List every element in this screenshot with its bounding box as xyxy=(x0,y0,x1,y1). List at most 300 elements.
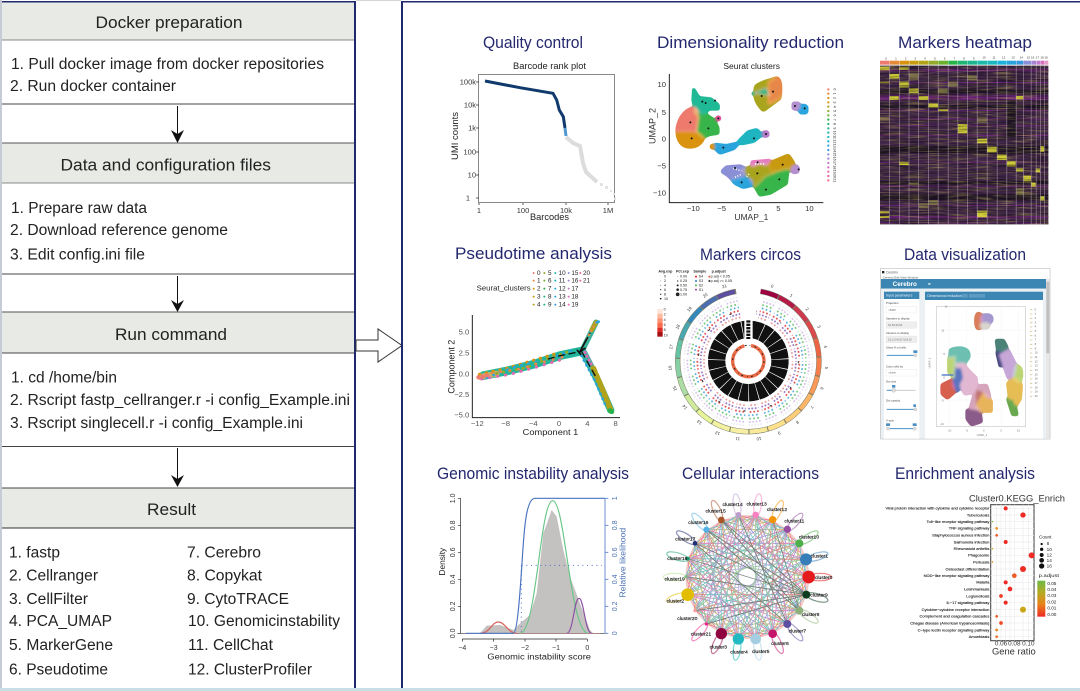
panel: input parameters: cluster xyxy=(889,372,896,375)
panel: input parameters: Dot opacity xyxy=(886,399,901,403)
step: Result: 3. CellFilter xyxy=(9,591,88,608)
chart: genomic instability density: −4 xyxy=(458,645,466,652)
step: Result: 12. ClusterProfiler xyxy=(188,662,312,678)
top island xyxy=(752,78,781,111)
legend: seurat clusters: 20 xyxy=(583,270,591,277)
node labels xyxy=(665,502,833,656)
chart: UMAP clusters: UMAP_1 xyxy=(734,212,769,222)
sector labels: 1 xyxy=(789,293,794,298)
chart: markers heatmap: 2 xyxy=(905,56,907,60)
legend: cerebro clusters: 2 xyxy=(1035,316,1037,320)
legends: 1.00 xyxy=(680,293,687,297)
legend: seurat clusters: 6 xyxy=(548,278,552,285)
sector labels: 0 xyxy=(770,283,775,289)
pathway labels: Cytokine−cytokine receptor interaction xyxy=(922,607,989,612)
legends xyxy=(658,270,732,301)
step: Data and configuration files: 3. Edit config.ini file xyxy=(10,246,145,264)
legends: S1 xyxy=(699,288,703,292)
chart: KEGG enrichment dot plot: Cluster0.KEGG_Enrich xyxy=(969,494,1065,504)
black bar track xyxy=(712,324,785,398)
chart: pseudotime trajectory: −12 xyxy=(471,419,484,428)
chart: markers heatmap: 13 xyxy=(1011,55,1015,59)
cluster centre markers xyxy=(689,91,806,191)
chart: genomic instability density: −2 xyxy=(521,645,529,652)
legend: seurat clusters: 13 xyxy=(559,294,566,301)
chart: barcode rank plot: 100k xyxy=(460,78,476,86)
pathway labels: Phagosome xyxy=(968,553,990,558)
legend: clusters: 5 xyxy=(832,110,836,112)
chart: barcode rank plot: 1 xyxy=(477,206,481,215)
chart: pseudotime trajectory: Component 1 xyxy=(523,427,579,437)
chart: KEGG enrichment dot plot: 0.06 xyxy=(995,641,1008,648)
node labels: cluster2 xyxy=(667,599,684,605)
step: Result: 4. PCA_UMAP xyxy=(9,613,112,630)
panel: dimensional reduction: 5 xyxy=(1000,429,1002,433)
sector labels: 21 xyxy=(721,283,728,289)
heading: Pseudotime analysis: Pseudotime analysis xyxy=(455,244,612,263)
panel: workflow steps xyxy=(0,0,356,688)
screenshot: Cerebro app xyxy=(881,268,1050,439)
legend: seurat clusters: 5 xyxy=(548,270,552,277)
colour bar: 2 xyxy=(664,313,666,317)
legend: seurat clusters: 12 xyxy=(559,286,566,293)
legend: cerebro clusters: 9 xyxy=(1035,346,1037,350)
arrow: data to run xyxy=(171,276,184,312)
chart: pseudotime trajectory: Component 2 xyxy=(447,340,457,394)
step: Result: 7. Cerebro xyxy=(187,544,261,562)
chart: KEGG enrichment dot plot: 0.08 xyxy=(1008,641,1021,648)
panel: dimensional reduction: -5 xyxy=(941,399,944,403)
panel: input parameters: Input parameters xyxy=(886,294,913,298)
chart: KEGG enrichment dot plot: Gene ratio xyxy=(992,646,1036,656)
chart: UMAP clusters: UMAP_2 xyxy=(648,108,658,144)
pathway labels: IL−17 signaling pathway xyxy=(946,600,989,605)
legend: count xyxy=(1039,535,1052,569)
panel: dimensional reduction: UMAP_2 xyxy=(928,357,932,368)
node labels: cluster15 xyxy=(706,509,726,515)
step: Result: 6. Pseudotime xyxy=(9,662,108,678)
node labels: cluster1 xyxy=(811,554,828,560)
step: Data and configuration files: 1. Prepare raw data xyxy=(11,200,147,217)
legend: clusters: 9 xyxy=(832,127,836,129)
colour bar: 8 xyxy=(664,328,666,332)
legend: cerebro clusters: 11 xyxy=(1035,355,1038,359)
chart: barcode rank plot: 1 xyxy=(466,194,470,202)
pathway labels: Amoebiasis xyxy=(969,634,989,639)
panel: dimensional reduction: 0 xyxy=(943,375,945,379)
chart: UMAP clusters: 5 xyxy=(776,204,780,213)
panel: outputs frame xyxy=(356,0,1080,688)
legends: 10 xyxy=(664,297,668,301)
step: Result: 1. fastp xyxy=(9,544,60,562)
chart: markers heatmap: 17 xyxy=(1036,55,1039,59)
legends: p.adjust xyxy=(712,270,726,274)
sector labels: 9 xyxy=(777,430,781,436)
chart: pseudotime trajectory: 2.5 xyxy=(459,348,469,357)
UMAP blobs xyxy=(942,313,1022,425)
chart: genomic instability density: −1 xyxy=(552,645,560,652)
chart: genomic instability density: 0 xyxy=(585,645,589,652)
legend: clusters: 16 xyxy=(832,157,836,161)
panel: input parameters: Projection xyxy=(886,301,899,305)
legend: cerebro clusters: 13 xyxy=(1035,364,1038,368)
legend: clusters: 15 xyxy=(832,152,836,156)
panel: input parameters: Clusters to display xyxy=(886,331,910,335)
chart: genomic instability density: 0.0 xyxy=(450,628,457,638)
pathway labels: Salmonella infection xyxy=(954,539,989,544)
panel: input parameters: Show % of cells xyxy=(886,345,907,349)
step: Run command: 1. cd /home/bin xyxy=(11,370,117,386)
legend: clusters: 2 xyxy=(832,97,836,99)
legend: seurat clusters: 14 xyxy=(559,302,566,309)
step: Data and configuration files xyxy=(2,143,354,274)
sector labels: 17 xyxy=(668,343,674,350)
legends: S3 xyxy=(699,279,703,283)
step: Docker preparation: 1. Pull docker image from docker repositories xyxy=(11,56,324,73)
sector labels: 12 xyxy=(714,430,721,436)
panel: input parameters: S1,S2,S3,S4 xyxy=(888,324,903,327)
chart: genomic instability density: Genomic instability score xyxy=(487,651,591,661)
legend: clusters xyxy=(827,88,836,182)
right island xyxy=(792,102,808,114)
panel: input parameters xyxy=(884,292,919,439)
chart: barcode rank plot: 1k xyxy=(468,124,476,132)
colour bar: 0 xyxy=(664,307,666,311)
screenshot: Cerebro app: Cerebro xyxy=(893,281,917,288)
sector labels: 14 xyxy=(681,403,688,411)
chart: markers heatmap: 14 xyxy=(1020,55,1023,59)
node labels: cluster8 xyxy=(802,612,820,618)
chart: markers heatmap: 1 xyxy=(895,56,897,60)
sector labels: 5 xyxy=(824,366,829,370)
step: Run command: 2. Rscript fastp_cellranger.r -i config_Example.ini xyxy=(10,392,350,409)
legends: 8 xyxy=(664,293,666,297)
step: Result: 11. CellChat xyxy=(188,637,274,654)
chart: pseudotime trajectory: −4 xyxy=(529,419,538,428)
node labels: cluster5 xyxy=(752,649,770,655)
legend: seurat clusters: 16 xyxy=(571,278,579,285)
chart: markers heatmap: 15 xyxy=(1027,55,1030,59)
legend: count: 10 xyxy=(1047,547,1052,552)
legend: clusters: 13 xyxy=(832,144,836,148)
pathway labels xyxy=(886,506,990,639)
legend: clusters: 11 xyxy=(832,135,836,139)
legend: seurat clusters: 10 xyxy=(559,270,566,277)
legends: p.adj < 0.05 xyxy=(711,275,730,279)
chart: markers heatmap: 0 xyxy=(885,56,887,60)
pathway labels: Viral protein interaction with cytokine and cytokine receptor xyxy=(886,506,990,511)
dots xyxy=(991,506,1035,638)
sector labels xyxy=(667,283,829,442)
pathway labels: NOD−like receptor signaling pathway xyxy=(924,573,989,578)
pathway labels: Osteoclast differentiation xyxy=(946,566,989,571)
chart: pseudotime trajectory: 4 xyxy=(585,419,590,428)
sector labels: 19 xyxy=(686,305,693,313)
chart: markers heatmap: 6 xyxy=(944,56,946,60)
step: Result: 2. Cellranger xyxy=(9,568,98,584)
left island xyxy=(677,88,720,147)
step: Result xyxy=(2,488,354,678)
pathway labels: Leishmaniasis xyxy=(964,586,989,591)
panel: input parameters: Dot size xyxy=(886,380,897,384)
heat matrix xyxy=(880,66,1048,224)
chart: genomic instability density xyxy=(437,493,627,661)
legends: Avg.exp xyxy=(658,270,673,274)
chart: barcode rank plot xyxy=(450,61,616,223)
step: Run command: 3. Rscript singlecell.r -i config_Example.ini xyxy=(10,415,303,432)
legend: cerebro clusters: 12 xyxy=(1035,359,1038,363)
legend: seurat clusters: 15 xyxy=(571,270,579,277)
colour strip xyxy=(880,61,1048,65)
step: Docker preparation: 2. Run docker container xyxy=(10,78,176,95)
legend: seurat clusters xyxy=(477,270,591,309)
right axis: 0.6 xyxy=(612,547,619,557)
outer sector ring xyxy=(648,261,848,461)
chart: UMAP clusters: −5 xyxy=(657,162,666,171)
step: Docker preparation: Docker preparation xyxy=(96,13,242,32)
panel: dimensional reduction xyxy=(925,292,1043,439)
legends: 4 xyxy=(664,284,666,288)
chart: UMAP clusters: −10 xyxy=(653,189,666,198)
chart: UMAP clusters: −5 xyxy=(717,204,726,213)
heading: Data visualization: Data visualization xyxy=(904,245,1026,264)
density area xyxy=(480,510,593,633)
legend: seurat clusters: Seurat_clusters xyxy=(477,286,531,293)
chart: UMAP clusters: −10 xyxy=(687,204,700,213)
chart: UMAP clusters: 0 xyxy=(662,135,666,144)
right axis: Relative likelihood xyxy=(617,528,627,598)
legend: cerebro clusters: 20 xyxy=(1035,394,1038,398)
screenshot: Cerebro app: Cerebro xyxy=(886,270,898,274)
chart: genomic instability density: 0.6 xyxy=(450,547,457,557)
legend: p.adjust: 0.02 xyxy=(1047,599,1057,604)
legend: cerebro clusters: 19 xyxy=(1035,390,1038,394)
legends: S2 xyxy=(699,284,703,288)
legend: p.adjust: 0.04 xyxy=(1047,587,1057,592)
pathway labels: Toll−like receptor signaling pathway xyxy=(927,519,989,524)
sector labels: 10 xyxy=(756,436,762,442)
mixture curves xyxy=(466,498,605,633)
legends: p.adj >= 0.05 xyxy=(711,279,732,283)
chart: genomic instability density: −3 xyxy=(490,645,498,652)
chart: barcode rank plot: 1M xyxy=(603,206,613,215)
legends: 0.00 xyxy=(680,275,687,279)
sector labels: 20 xyxy=(702,292,709,299)
sector labels: 2 xyxy=(805,307,810,312)
sector labels: 8 xyxy=(794,420,800,425)
colour bar: 10 xyxy=(664,333,668,337)
pathway labels: Staphylococcus aureus infection xyxy=(932,533,989,538)
legend: p.adjust xyxy=(1037,573,1060,617)
panel: dimensional reduction: UMAP_1 xyxy=(977,433,988,437)
panel: input parameters: 0,1,2,3,4,5,6,7,8,9,10 xyxy=(888,338,912,341)
right axis xyxy=(605,496,627,635)
legend: cerebro clusters: 6 xyxy=(1035,333,1037,337)
node labels: cluster21 xyxy=(691,631,711,637)
chart: UMAP clusters: 10 xyxy=(657,80,666,89)
legend: cerebro clusters: 16 xyxy=(1035,377,1038,381)
legend: clusters: 4 xyxy=(832,106,836,108)
legend: p.adjust: p.adjust xyxy=(1039,573,1060,578)
chart: pseudotime trajectory: 0.0 xyxy=(459,369,469,378)
node labels: cluster19 xyxy=(665,576,685,582)
step: Result: Result xyxy=(147,500,196,519)
legend: cerebro clusters xyxy=(1030,307,1038,398)
chart: barcode rank plot: 10 xyxy=(468,170,476,180)
node labels: cluster10 xyxy=(799,535,819,541)
right axis: 0 xyxy=(612,631,619,635)
bottom island xyxy=(722,155,799,195)
legend: clusters: 10 xyxy=(832,131,836,135)
node labels: cluster13 xyxy=(747,502,767,508)
legend: clusters: 12 xyxy=(832,139,836,143)
node labels: cluster6 xyxy=(771,641,789,647)
dotted marker tracks xyxy=(684,297,813,425)
legend: seurat clusters: 2 xyxy=(537,286,541,293)
chart: barcode rank plot: 10k xyxy=(464,100,476,110)
legends: Pct.exp xyxy=(676,270,690,274)
chart: UMAP clusters: 5 xyxy=(662,108,666,117)
sector labels: 13 xyxy=(695,419,703,426)
pathway labels: Legionellosis xyxy=(966,593,989,598)
legend: seurat clusters: 19 xyxy=(571,302,579,309)
chart: markers heatmap: 5 xyxy=(934,56,936,60)
legend: clusters: 14 xyxy=(832,148,836,152)
node labels: cluster16 xyxy=(688,520,709,526)
legend: p.adjust: 0.00 xyxy=(1047,612,1057,617)
step: Result: 10. Genomicinstability xyxy=(188,613,340,630)
legend: clusters: 18 xyxy=(832,165,836,169)
legend: seurat clusters: 18 xyxy=(571,294,579,301)
legend: cerebro clusters: 3 xyxy=(1035,320,1037,324)
chart: genomic instability density: Density xyxy=(437,547,447,576)
legend: p.adjust: 0.01 xyxy=(1047,606,1057,611)
legend: cerebro clusters: 17 xyxy=(1035,381,1038,385)
sector labels: 4 xyxy=(823,345,828,349)
chart: pseudotime trajectory: 5.0 xyxy=(459,327,469,336)
legends: 2 xyxy=(664,279,666,283)
chart: barcode rank plot: 10k xyxy=(560,206,572,215)
right axis: 0.8 xyxy=(612,520,619,530)
heading: Markers heatmap: Markers heatmap xyxy=(898,33,1032,52)
panel: dimensional reduction: -5 xyxy=(966,429,969,433)
heading: Enrichment analysis: Enrichment analysis xyxy=(895,464,1035,483)
panel: input parameters: UMAP xyxy=(889,309,896,312)
chart: genomic instability density: 0.4 xyxy=(450,574,457,584)
chart: markers heatmap: 16 xyxy=(1031,55,1035,59)
sector labels: 11 xyxy=(735,436,740,442)
panel: dimensional reduction: -10 xyxy=(940,422,944,426)
legend: seurat clusters: 8 xyxy=(548,294,552,301)
legend: seurat clusters: 7 xyxy=(548,286,552,293)
legends: Sample xyxy=(693,270,706,274)
legend: seurat clusters: 3 xyxy=(537,294,541,301)
step: Run command xyxy=(2,312,354,446)
arrow: workflow to outputs xyxy=(356,329,402,362)
chart: pseudotime trajectory: −8 xyxy=(501,419,510,428)
legend: cerebro clusters: 7 xyxy=(1035,338,1037,342)
legend: cerebro clusters: 1 xyxy=(1035,312,1037,316)
pathway labels: Pertussis xyxy=(973,559,989,564)
legend: clusters: 6 xyxy=(832,114,836,116)
colour bar xyxy=(657,307,668,337)
colour bar: 4 xyxy=(664,318,666,322)
legend: clusters: 17 xyxy=(832,161,836,165)
chart: markers heatmap: 12 xyxy=(1002,55,1006,59)
step: Run command: Run command xyxy=(115,325,227,344)
panel: input parameters: Color cells by xyxy=(886,364,904,368)
chart: markers heatmap: 4 xyxy=(924,56,926,60)
legend: clusters: 21 xyxy=(832,178,836,182)
panel: dimensional reduction: -10 xyxy=(947,429,952,433)
legend: cerebro clusters: 18 xyxy=(1035,385,1038,389)
node labels: cluster7 xyxy=(789,629,806,635)
chart: markers circos xyxy=(648,261,848,461)
chart: markers heatmap: 10 xyxy=(982,55,986,59)
chart: UMAP clusters: 0 xyxy=(748,204,752,213)
panel: dimensional reduction: 10 xyxy=(941,329,945,333)
legend: p.adjust: 0.03 xyxy=(1047,593,1057,598)
legend: cerebro clusters: 5 xyxy=(1035,329,1037,333)
chart: markers heatmap: 3 xyxy=(914,56,916,60)
screenshot: Cerebro app: ≡ xyxy=(928,282,931,287)
page frame: bottom strip xyxy=(0,688,1080,691)
legend: clusters: 20 xyxy=(832,174,836,178)
legends: 0.75 xyxy=(680,288,687,292)
middle islands xyxy=(711,129,768,153)
chart: UMAP clusters xyxy=(648,62,836,222)
pathway labels: TNF signaling pathway xyxy=(949,526,989,531)
pathway labels: Chagas disease (American trypanosomiasis) xyxy=(910,620,990,625)
legend: seurat clusters: 9 xyxy=(548,302,552,309)
right axis: 0.2 xyxy=(612,601,619,611)
legend: seurat clusters: 4 xyxy=(537,302,541,309)
legend: seurat clusters: 17 xyxy=(571,286,579,293)
sector labels: 15 xyxy=(671,385,678,392)
arrow: docker to data xyxy=(171,106,184,143)
chart: pseudotime trajectory: −2.5 xyxy=(454,390,469,399)
panel: dimensional reduction: 10 xyxy=(1017,429,1020,433)
legend: clusters: 19 xyxy=(832,170,836,174)
chart: markers heatmap: 11 xyxy=(992,55,996,59)
legend: clusters: 0 xyxy=(832,88,836,90)
sector labels: 18 xyxy=(674,323,681,330)
chart: barcode rank plot: UMI counts xyxy=(450,112,461,160)
legends: S4 xyxy=(699,275,703,279)
step: Result: 9. CytoTRACE xyxy=(187,591,289,608)
legend: cerebro clusters: 14 xyxy=(1035,368,1038,372)
chart: markers heatmap: 7 xyxy=(953,56,955,60)
chart: UMAP clusters: 10 xyxy=(805,204,814,213)
network edges xyxy=(686,515,809,639)
node labels: cluster17 xyxy=(675,537,696,543)
legend: seurat clusters: 1 xyxy=(537,278,541,285)
node labels: cluster11 xyxy=(784,519,804,525)
chart: barcode rank plot: Barcodes xyxy=(530,212,569,223)
legends: 0.50 xyxy=(680,284,687,288)
legends: 6 xyxy=(664,288,666,292)
legend: cerebro clusters: 10 xyxy=(1035,351,1038,355)
legend: cerebro clusters: 4 xyxy=(1035,325,1037,329)
sector labels: 7 xyxy=(809,405,815,410)
heading: Dimensionality reduction: Dimensionality reduction xyxy=(657,33,844,52)
chart: pseudotime trajectory: 8 xyxy=(614,419,618,428)
step: Docker preparation xyxy=(2,2,354,104)
node labels: cluster20 xyxy=(677,616,698,622)
chart: pseudotime trajectory: −5.0 xyxy=(454,411,469,420)
node labels: cluster18 xyxy=(667,556,688,562)
trajectory branches xyxy=(478,322,612,412)
